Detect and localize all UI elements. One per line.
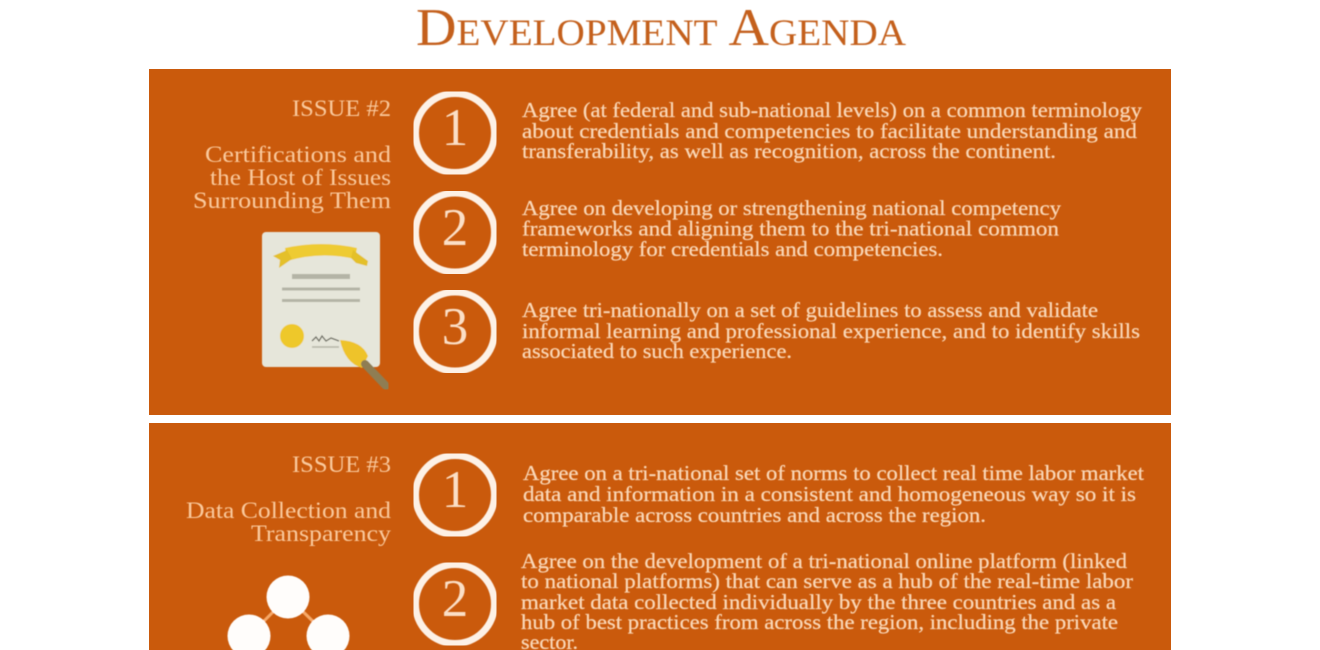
- panel: issue 2: [149, 69, 1171, 415]
- item 1 number: 1: [442, 461, 468, 519]
- item 1 text: data and information in a consistent and homogeneous way so it is: [523, 482, 1136, 506]
- issue 2 heading: Surrounding Them: [193, 188, 391, 213]
- item 1 text: transferability, as well as recognition, across the continent.: [522, 139, 1056, 163]
- item 1 number: [416, 94, 494, 172]
- item 1 text: Agree on a tri-national set of norms to collect real time labor market: [523, 461, 1144, 485]
- item 2 text: terminology for credentials and competencies.: [522, 237, 943, 261]
- item 2 number: [416, 193, 494, 272]
- item 2 text: frameworks and aligning them to the tri-national common: [522, 216, 1060, 240]
- item 2 number: [416, 564, 494, 644]
- item 3 number: [416, 292, 494, 371]
- item 2 text: Agree on developing or strengthening national competency: [522, 196, 1062, 220]
- issue 3 heading: [186, 452, 392, 546]
- item 1 number: 1: [442, 99, 468, 157]
- item 2 text: hub of best practices from across the region, including the private: [521, 610, 1118, 634]
- item 3 text: [522, 298, 1140, 363]
- icon: network: [228, 576, 350, 650]
- item 2 number: 2: [442, 199, 468, 257]
- issue 2 heading: the Host of Issues: [210, 165, 391, 190]
- item 3 text: associated to such experience.: [522, 339, 792, 363]
- item 2 number: 2: [442, 570, 468, 628]
- icon: certificate: [262, 232, 386, 386]
- item 1 text: comparable across countries and across the region.: [523, 503, 986, 527]
- issue 3 heading: ISSUE #3: [292, 452, 391, 477]
- item 2 text: Agree on the development of a tri-national online platform (linked: [521, 549, 1128, 573]
- title: Development Agenda: [416, 0, 906, 57]
- item 1 text: about credentials and competencies to facilitate understanding and: [522, 119, 1138, 143]
- item 3 text: Agree tri-nationally on a set of guidelines to assess and validate: [522, 298, 1098, 322]
- issue 3 heading: Transparency: [251, 521, 392, 546]
- issue 2 heading: Certifications and: [205, 142, 392, 167]
- item 1 text: [522, 98, 1143, 163]
- item 2 text: market data collected individually by the three countries and as a: [521, 590, 1117, 614]
- item 2 text: to national platforms) that can serve as a hub of the real-time labor: [521, 569, 1133, 593]
- item 1 text: Agree (at federal and sub-national levels) on a common terminology: [522, 98, 1143, 122]
- item 3 number: 3: [442, 298, 468, 356]
- item 1 number: [416, 456, 494, 534]
- item 2 text: [521, 549, 1133, 650]
- issue 2 heading: ISSUE #2: [292, 96, 391, 121]
- issue 2 heading: [193, 96, 392, 213]
- item 2 text: [522, 196, 1062, 261]
- panel: issue 3: [149, 423, 1171, 650]
- issue 3 heading: Data Collection and: [186, 498, 392, 523]
- item 3 text: informal learning and professional experience, and to identify skills: [522, 319, 1140, 343]
- item 1 text: [523, 461, 1144, 527]
